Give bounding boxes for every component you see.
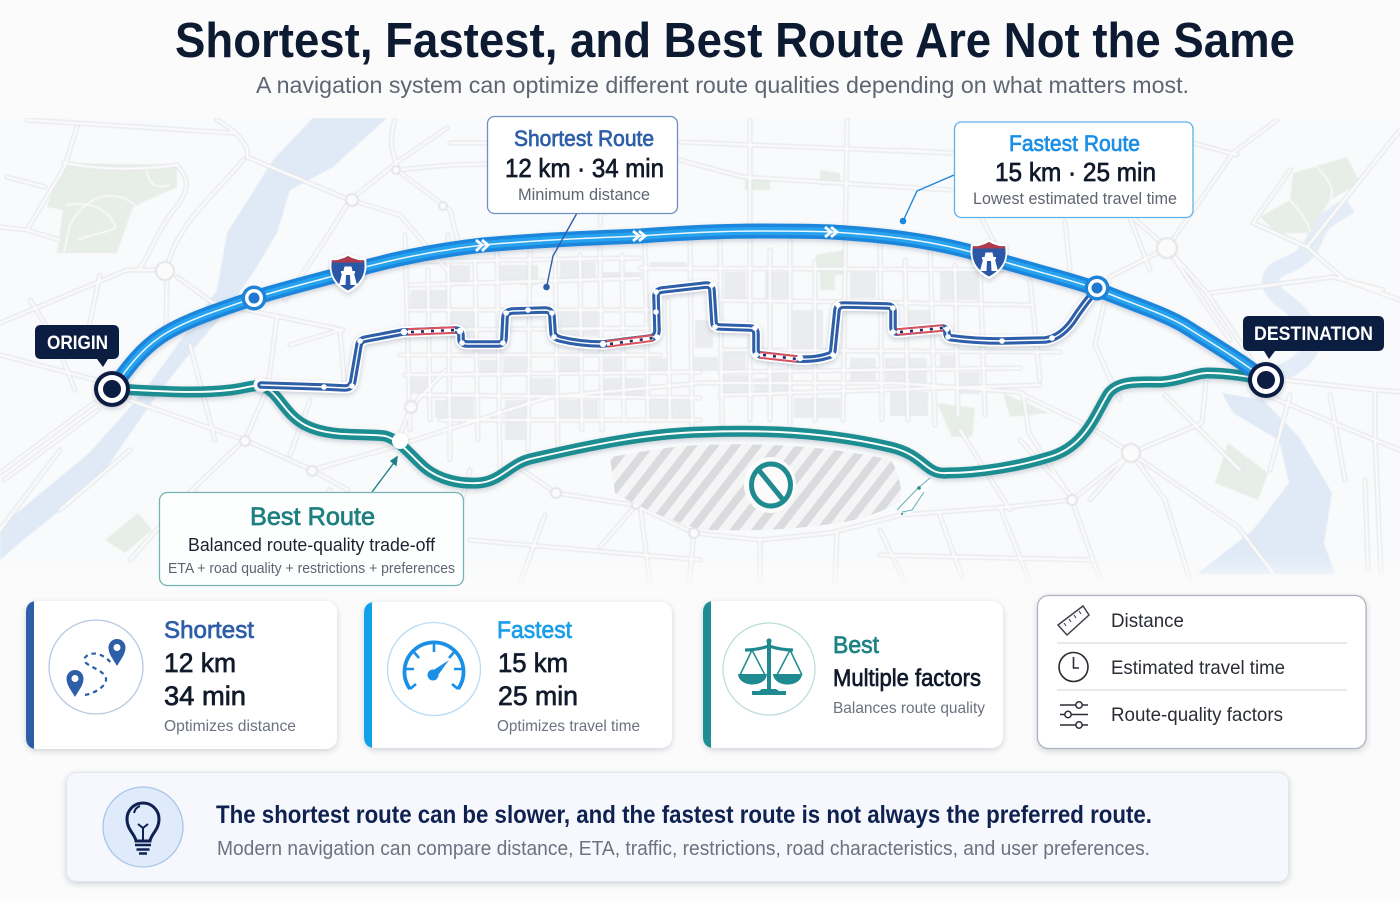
panel: shortest card: 34 min [164, 681, 246, 711]
panel: fastest card: 15 km [498, 648, 568, 678]
panel: fastest card: Fastest [497, 617, 572, 644]
panel: takeaway banner: The shortest route can be slower, and the fastest route is not always the preferred route. [216, 801, 1152, 829]
icon: highway shield right [970, 239, 1008, 279]
destination marker [1248, 362, 1284, 398]
subtitle: A navigation system can optimize different route qualities depending on what matters most. [256, 72, 1189, 98]
fastest route (bright blue) [112, 227, 1266, 389]
panel: fastest card: 25 min [498, 681, 578, 711]
callout: shortest route: Shortest Route [514, 126, 654, 151]
best route (teal) [112, 373, 1266, 483]
icon: no entry [744, 457, 796, 513]
panel: fastest card [364, 602, 672, 748]
base map [0, 118, 1400, 592]
panel: best card: Multiple factors [833, 665, 981, 692]
direction arrows [476, 227, 837, 251]
congestion segments [408, 328, 943, 359]
icon: ruler [1058, 606, 1089, 635]
panel: factors list: Distance [1111, 610, 1184, 632]
panel: best card: Best [833, 632, 879, 659]
blocked side path [897, 478, 930, 515]
leader line: best [372, 457, 397, 492]
shortest route (dark blue) [261, 282, 1097, 390]
callout: shortest route: Minimum distance [518, 186, 650, 204]
callout: best route: ETA + road quality + restrictions + preferences [168, 560, 455, 577]
origin label [35, 325, 119, 367]
water: rivers [0, 118, 1350, 574]
destination label: DESTINATION [1254, 323, 1373, 345]
panel: shortest card: Optimizes distance [164, 718, 296, 735]
parks [47, 157, 1360, 553]
waypoint markers [242, 276, 1110, 310]
icon: speedometer [388, 622, 480, 716]
panel: shortest card: Shortest [164, 617, 254, 644]
callout: fastest route: Fastest Route [1009, 131, 1140, 156]
icon: sliders [1060, 702, 1088, 728]
panel: factors list [1038, 596, 1366, 748]
callout: shortest route [488, 116, 678, 214]
panel: fastest card: Optimizes travel time [497, 718, 640, 735]
panel: takeaway banner [66, 772, 1288, 882]
icon: clock [1059, 652, 1088, 682]
origin label: ORIGIN [47, 332, 108, 354]
panel: shortest card: 12 km [164, 648, 236, 678]
title: Shortest, Fastest, and Best Route Are Not the Same [175, 14, 1295, 68]
callout: fastest route: Lowest estimated travel time [973, 190, 1177, 208]
icon: balance scale [723, 623, 815, 715]
leader line: shortest [544, 213, 577, 290]
panel: factors list: Estimated travel time [1111, 657, 1285, 679]
panel: best card: Balances route quality [833, 700, 985, 717]
callout: best route [160, 492, 464, 586]
leader line: fastest [900, 175, 954, 224]
callout: best route: Balanced route-quality trade-off [188, 535, 436, 555]
callout: fastest route [954, 122, 1193, 218]
panel: factors list: Route-quality factors [1111, 704, 1283, 726]
panel: best card [703, 601, 1003, 748]
city blocks [410, 262, 980, 440]
panel: shortest card [26, 601, 337, 749]
callout: shortest route: 12 km · 34 min [505, 153, 664, 183]
panel: takeaway banner: Modern navigation can compare distance, ETA, traffic, restrictions, road characteristics, and user preferences. [217, 837, 1150, 860]
destination label [1243, 316, 1384, 359]
callout: best route: Best Route [250, 503, 375, 531]
callout: fastest route: 15 km · 25 min [995, 157, 1156, 187]
bottom fade of map [0, 556, 1400, 592]
icon: light bulb [103, 787, 183, 867]
icon: highway shield left [329, 253, 367, 293]
road network [0, 118, 1400, 583]
icon: route pins [49, 620, 143, 714]
restricted zone with no-entry sign [610, 444, 901, 530]
origin marker [94, 371, 130, 407]
